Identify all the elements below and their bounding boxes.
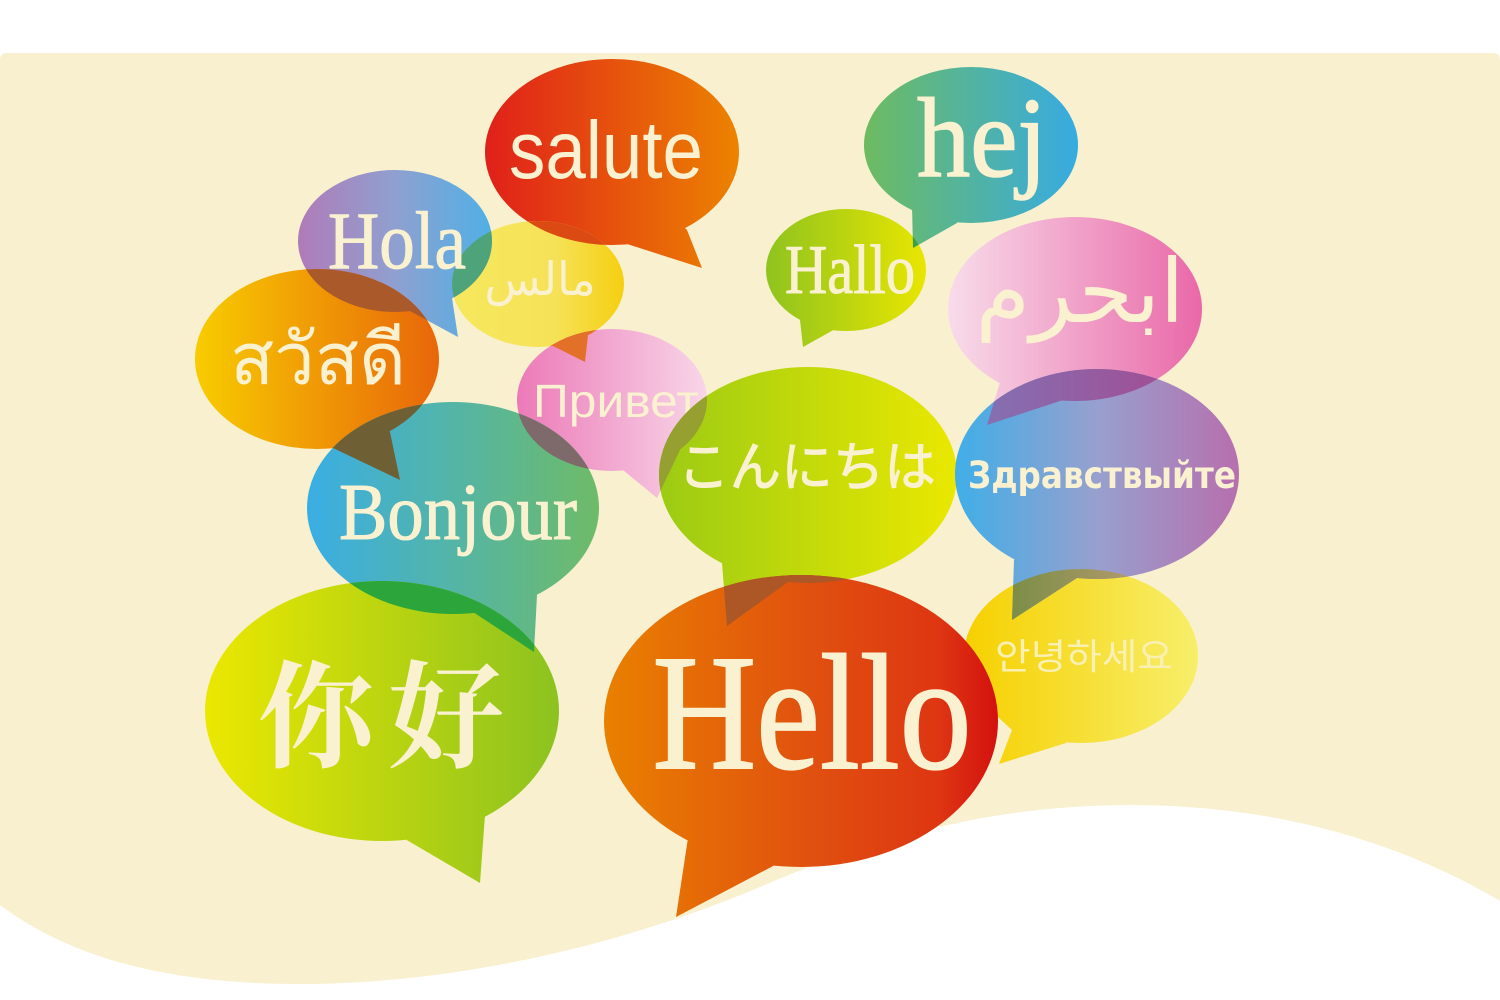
bubble: Korean xyxy=(964,569,1198,764)
bubble overlap tints xyxy=(306,221,1158,771)
bubble: salute xyxy=(485,59,739,268)
bubble: Hello xyxy=(604,575,998,917)
text: Korean: 안녕하세요 xyxy=(995,636,1173,677)
bubble: Thai xyxy=(195,269,439,480)
bubble: Arabic yellow xyxy=(452,221,624,362)
bubble: Arabic pink xyxy=(948,217,1202,425)
white wave xyxy=(0,805,1500,1000)
speech bubble shapes xyxy=(195,59,1239,917)
bubble: Bonjour xyxy=(307,402,599,652)
text: salute: salute xyxy=(509,105,703,196)
bubble: Nihao xyxy=(205,581,559,883)
text: Privet: Привет xyxy=(533,375,699,427)
bubble: Hallo xyxy=(766,209,926,347)
text: Hello: Hello xyxy=(652,621,972,804)
text: hej: hej xyxy=(917,76,1047,201)
bubble: hej xyxy=(864,67,1078,248)
text: Thai: สวัสดี xyxy=(230,317,406,401)
text: Konnichiwa: こんにちは xyxy=(678,438,936,498)
text: Bonjour: Bonjour xyxy=(339,469,577,557)
bubble: Privet xyxy=(517,329,707,498)
text: Nihao: 你好 xyxy=(258,625,504,792)
text: Arabic pink: ابحرم xyxy=(976,240,1184,344)
bubble: Konnichiwa xyxy=(659,367,957,626)
bubble: Hola xyxy=(298,170,492,337)
bubble: Zdravstvuyte xyxy=(955,369,1239,620)
text: Hola: Hola xyxy=(328,195,466,286)
text: Zdravstvuyte: Здравствыйте xyxy=(968,454,1236,497)
text: Arabic yellow: مالس xyxy=(484,252,596,306)
text: Hallo: Hallo xyxy=(785,232,915,309)
